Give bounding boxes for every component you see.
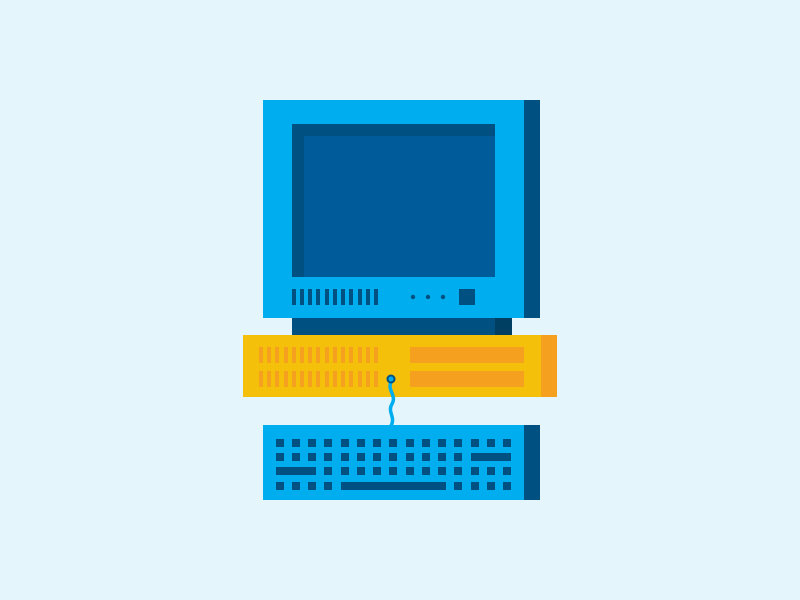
screen [292,124,495,277]
monitor neck [292,318,512,335]
cable [390,382,393,426]
keys [276,439,511,490]
drive bays [410,347,524,387]
CPU vents [259,347,378,387]
monitor [263,100,540,318]
monitor buttons [411,289,475,305]
monitor vents [292,289,378,305]
keyboard [263,425,540,500]
CPU case [243,335,557,397]
port [388,376,394,382]
